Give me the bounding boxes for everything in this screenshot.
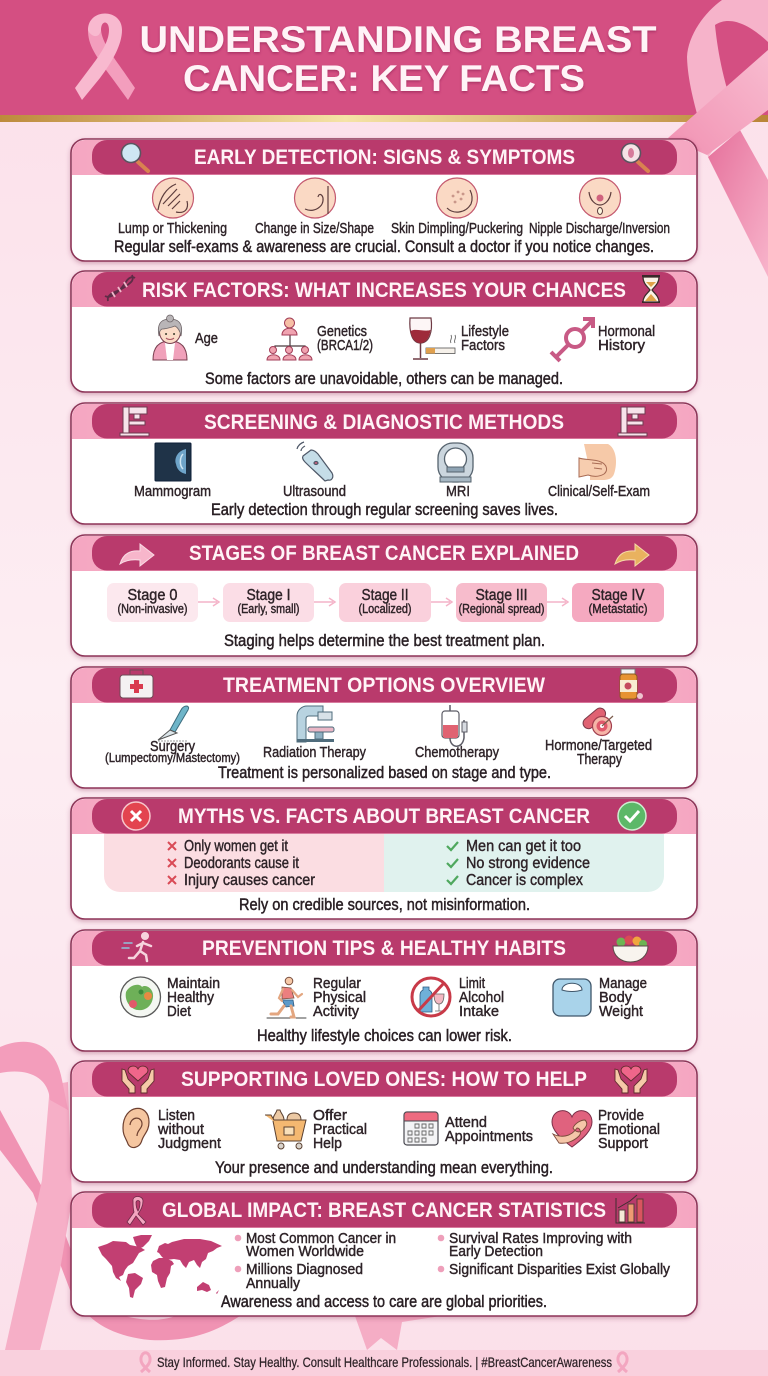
title — [140, 19, 657, 99]
label: activity: Regular — [313, 976, 361, 992]
heading: risk factors: RISK FACTORS: WHAT INCREASES YOUR CHANCES — [142, 279, 626, 302]
label: diet — [167, 976, 220, 1020]
label: hormonal: History — [598, 338, 646, 354]
label: listen: Listen — [158, 1108, 195, 1124]
facts list: No strong evidence — [466, 855, 590, 872]
label: hormone therapy: Hormone/Targeted — [545, 738, 652, 754]
icon: hourglass — [642, 276, 660, 302]
stats left: Millions Diagnosed — [246, 1262, 363, 1278]
stats left — [235, 1231, 396, 1292]
stats right: Significant Disparities Exist Globally — [449, 1262, 671, 1278]
label: lifestyle: Factors — [461, 338, 505, 354]
heading: early detection: EARLY DETECTION: SIGNS & SYMPTOMS — [194, 146, 575, 169]
title: UNDERSTANDING BREAST — [140, 19, 657, 60]
icon: green check badge — [618, 802, 646, 830]
icon: radiation machine — [297, 706, 334, 742]
label: listen — [157, 1108, 221, 1152]
label: activity — [313, 976, 366, 1020]
label: surgery: (Lumpectomy/Mastectomy) — [105, 751, 240, 765]
label: practical help: Offer — [313, 1108, 347, 1124]
icon: ultrasound — [297, 442, 333, 481]
note: support: Your presence and understanding mean everything. — [215, 1159, 553, 1177]
label: lifestyle — [461, 324, 509, 354]
icon: scalpel — [158, 706, 189, 741]
label: hormone therapy: Therapy — [577, 752, 623, 768]
arrow — [547, 598, 568, 606]
panel: myths vs facts — [71, 798, 697, 919]
icon: magnifier left — [122, 144, 148, 171]
icon: title ribbon — [75, 14, 135, 100]
note: screening: Early detection through regular screening saves lives. — [211, 501, 558, 519]
labels: signs — [118, 221, 670, 237]
stage I: (Early, small) — [238, 602, 300, 616]
labels: methods: Mammogram — [134, 484, 211, 500]
icon: arrow right — [615, 544, 649, 566]
note: prevention: Healthy lifestyle choices can lower risk. — [257, 1027, 512, 1045]
labels: methods — [134, 484, 650, 500]
icon: healthy plate — [120, 977, 160, 1017]
icon: machine right — [618, 407, 647, 436]
icon: size change — [294, 178, 336, 218]
label: radiation: Radiation Therapy — [263, 745, 367, 761]
label: diet: Maintain — [167, 976, 220, 992]
label: alcohol: Limit — [459, 976, 485, 992]
labels: signs: Change in Size/Shape — [255, 221, 374, 237]
icon: footer ribbon right — [618, 1353, 627, 1372]
icon: runner — [267, 977, 306, 1018]
stage IV — [572, 583, 664, 622]
labels: signs: Nipple Discharge/Inversion — [529, 221, 670, 237]
icon: fruit bowl — [613, 936, 648, 962]
panel: treatment — [71, 667, 697, 788]
header banner — [0, 0, 768, 122]
label: emotional support: Provide — [598, 1108, 644, 1124]
label: practical help: Practical — [313, 1122, 367, 1138]
label: activity: Physical — [313, 990, 366, 1006]
stage IV: Stage IV — [592, 587, 645, 604]
decorative ribbon: bottom left — [0, 1042, 441, 1350]
stage I: Stage I — [246, 587, 290, 604]
panel: prevention — [71, 930, 697, 1051]
label: genetics — [317, 324, 373, 354]
label: genetics: Genetics — [317, 324, 367, 340]
stats left: Most Common Cancer in — [246, 1231, 396, 1247]
icon: mammogram — [155, 443, 191, 481]
heading: support: SUPPORTING LOVED ONES: HOW TO HELP — [181, 1068, 587, 1091]
label: weight — [599, 976, 647, 1020]
stage 0 — [107, 583, 198, 622]
icon: nipple discharge — [580, 178, 620, 218]
stats right: Survival Rates Improving with — [449, 1231, 632, 1247]
stage III: (Regional spread) — [458, 602, 544, 616]
footer — [0, 1350, 768, 1376]
icon: grandmother — [153, 315, 187, 360]
note: treatment: Treatment is personalized based on stage and type. — [218, 764, 551, 782]
label: practical help — [313, 1108, 367, 1152]
labels: methods: Clinical/Self-Exam — [548, 484, 650, 500]
icon: gender symbols — [551, 319, 593, 361]
label: hormonal: Hormonal — [598, 324, 655, 340]
stage IV: (Metastatic) — [588, 602, 648, 616]
panel: stages — [71, 535, 697, 656]
label: listen: without — [157, 1122, 204, 1138]
label: appointments: Appointments — [445, 1129, 533, 1145]
icon: runner small — [122, 933, 151, 961]
arrow — [314, 598, 335, 606]
label: alcohol — [459, 976, 504, 1020]
label: diet: Diet — [167, 1004, 191, 1020]
stage 0: (Non-invasive) — [118, 602, 188, 616]
icon: footer ribbon left — [141, 1353, 150, 1372]
label: genetics: (BRCA1/2) — [317, 338, 373, 354]
icon: bar chart — [616, 1195, 645, 1223]
label: listen: Judgment — [158, 1136, 221, 1152]
stats right: Early Detection — [449, 1244, 543, 1260]
myths list: Injury causes cancer — [184, 872, 315, 889]
label: chemotherapy: Chemotherapy — [415, 745, 500, 761]
icon: heart hug — [552, 1111, 592, 1147]
label: hormone therapy — [545, 738, 652, 768]
footer text: Stay Informed. Stay Healthy. Consult Healthcare Professionals. | #BreastCancerAwareness — [157, 1354, 612, 1370]
facts list: Cancer is complex — [466, 872, 583, 889]
facts list: Men can get it too — [466, 838, 581, 855]
icon: shopping cart — [265, 1110, 306, 1149]
icon: hands heart right — [615, 1066, 647, 1093]
icon: hormone capsule and target — [581, 706, 613, 736]
label: age: Age — [195, 331, 218, 347]
stage 0: Stage 0 — [128, 587, 178, 604]
stage II: (Localized) — [358, 602, 412, 616]
label: lifestyle: Lifestyle — [461, 324, 509, 340]
heading: stages: STAGES OF BREAST CANCER EXPLAINED — [189, 542, 579, 565]
stats left: Annually — [246, 1276, 301, 1292]
heading: global impact: GLOBAL IMPACT: BREAST CANCER STATISTICS — [162, 1199, 606, 1222]
icon: dna — [105, 275, 135, 301]
icon: lump — [152, 178, 194, 218]
stats left: Women Worldwide — [246, 1244, 364, 1260]
icon: arrow left — [120, 544, 154, 566]
note: stages: Staging helps determine the best treatment plan. — [224, 632, 545, 650]
icon: iv bag — [442, 705, 467, 746]
icon: calendar — [404, 1112, 438, 1145]
label: appointments — [445, 1115, 533, 1145]
stats right — [438, 1231, 671, 1278]
heading: screening: SCREENING & DIAGNOSTIC METHODS — [204, 411, 564, 434]
heading: myths: MYTHS VS. FACTS ABOUT BREAST CANCER — [178, 805, 590, 828]
myths list: Deodorants cause it — [184, 855, 300, 872]
labels: signs: Lump or Thickening — [118, 221, 227, 237]
arrow — [198, 598, 219, 606]
icon: dimpling — [436, 178, 478, 218]
decorative ribbon: top right — [668, 0, 768, 277]
icon: family tree — [267, 318, 312, 360]
icon: pill bottle — [620, 669, 643, 699]
icon: self exam — [579, 444, 616, 480]
label: surgery: Surgery — [150, 739, 196, 755]
label: weight: Manage — [599, 976, 647, 992]
label: emotional support — [598, 1108, 660, 1152]
stage I — [223, 583, 314, 622]
panel: support — [71, 1061, 697, 1182]
icon: magnifier right — [622, 144, 648, 171]
label: activity: Activity — [313, 1004, 360, 1020]
facts list — [384, 834, 664, 892]
heading: treatment: TREATMENT OPTIONS OVERVIEW — [223, 674, 545, 697]
panel: risk factors — [71, 271, 697, 392]
panel: global impact — [71, 1192, 697, 1316]
title: CANCER: KEY FACTS — [183, 58, 585, 99]
icon: hands heart left — [122, 1066, 154, 1093]
label: emotional support: Emotional — [598, 1122, 660, 1138]
heading: prevention: PREVENTION TIPS & HEALTHY HABITS — [202, 937, 566, 960]
label: emotional support: Support — [598, 1136, 648, 1152]
stage II: Stage II — [362, 587, 408, 604]
label: appointments: Attend — [445, 1115, 487, 1131]
label: practical help: Help — [313, 1136, 342, 1152]
icon: red cross badge — [122, 802, 150, 830]
icon: machine left — [120, 407, 149, 436]
note: early detection: Regular self-exams & awareness are crucial. Consult a doctor if you notice changes. — [114, 238, 654, 256]
icon: ear — [123, 1108, 149, 1147]
label: weight: Weight — [599, 1004, 643, 1020]
stage III: Stage III — [476, 587, 528, 604]
label: alcohol: Alcohol — [459, 990, 504, 1006]
note: risk factors: Some factors are unavoidable, others can be managed. — [205, 370, 563, 388]
labels: methods: Ultrasound — [283, 484, 346, 500]
stage II — [339, 583, 431, 622]
icon: small ribbon — [127, 1196, 146, 1225]
icon: scale — [553, 979, 591, 1016]
panel: early detection — [71, 139, 697, 261]
label: alcohol: Intake — [459, 1004, 499, 1020]
icon: wine and cigarette — [410, 318, 456, 359]
arrow — [431, 598, 452, 606]
label: surgery — [105, 739, 240, 765]
panel: screening — [71, 403, 697, 524]
stage III — [456, 583, 547, 622]
label: weight: Body — [599, 990, 633, 1006]
icon: first aid kit — [120, 670, 153, 698]
note: myths: Rely on credible sources, not misinformation. — [239, 896, 530, 914]
myths list — [104, 834, 384, 892]
labels: methods: MRI — [446, 484, 470, 500]
note: global impact: Awareness and access to care are global priorities. — [221, 1293, 547, 1311]
icon: mri — [438, 443, 473, 482]
myths list: Only women get it — [184, 838, 289, 855]
world map — [98, 1235, 222, 1298]
label: diet: Healthy — [167, 990, 215, 1006]
label: hormonal — [598, 324, 655, 354]
labels: signs: Skin Dimpling/Puckering — [391, 221, 523, 237]
icon: no alcohol — [412, 978, 450, 1016]
